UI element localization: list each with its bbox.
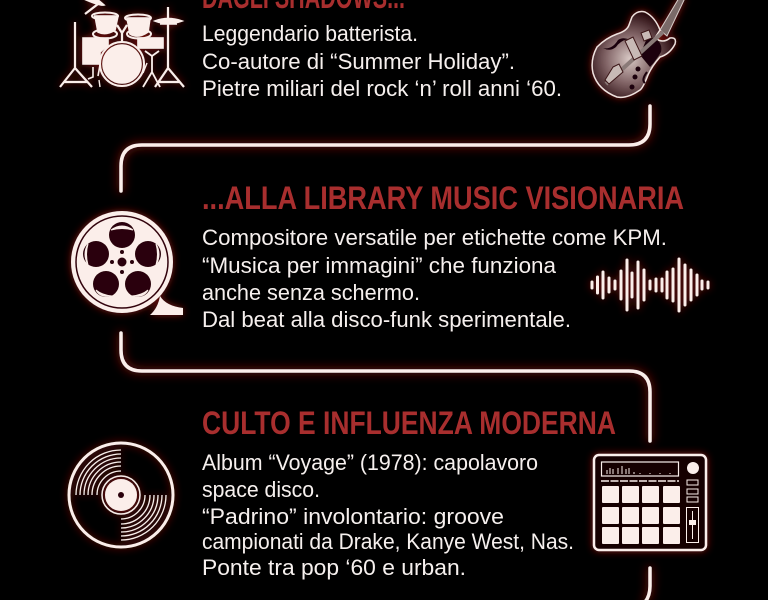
- text block: album voyage: [202, 450, 574, 580]
- text block: compositore: [202, 225, 667, 332]
- text block: album voyage: “Padrino” involontario: groove: [202, 504, 504, 529]
- text block: compositore: Dal beat alla disco-funk sperimentale.: [202, 307, 571, 332]
- connector: bottom exit: [645, 568, 650, 600]
- sampler screen: [602, 462, 678, 476]
- text block: compositore: anche senza schermo.: [202, 280, 420, 305]
- icon: film reel: [71, 211, 183, 315]
- connector: guitar to film reel: [121, 106, 650, 191]
- sampler pads: [602, 486, 680, 544]
- heading: library music: ...ALLA LIBRARY MUSIC VISIONARIA: [202, 180, 684, 216]
- text block: compositore: “Musica per immagini” che funziona: [202, 253, 556, 278]
- icon: electric guitar: [592, 0, 685, 97]
- text block: batterista: Co-autore di “Summer Holiday”.: [202, 49, 515, 74]
- icon: drum kit: [60, 0, 184, 87]
- text block: batterista: [202, 21, 562, 101]
- text block: compositore: Compositore versatile per etichette come KPM.: [202, 225, 667, 250]
- text block: album voyage: Ponte tra pop ‘60 e urban.: [202, 555, 466, 580]
- connector: film reel to MPC: [121, 333, 650, 441]
- text block: album voyage: space disco.: [202, 477, 320, 502]
- icon: audio waveform: [592, 259, 708, 311]
- heading: culto e influenza: CULTO E INFLUENZA MODERNA: [202, 405, 616, 441]
- text block: batterista: Leggendario batterista.: [202, 21, 418, 46]
- text block: album voyage: Album “Voyage” (1978): capolavoro: [202, 450, 538, 475]
- icon: MPC sampler: [594, 455, 706, 550]
- text block: album voyage: campionati da Drake, Kanye West, Nas.: [202, 529, 574, 554]
- icon: vinyl record: [69, 443, 173, 547]
- text block: batterista: Pietre miliari del rock ‘n’ roll anni ‘60.: [202, 76, 562, 101]
